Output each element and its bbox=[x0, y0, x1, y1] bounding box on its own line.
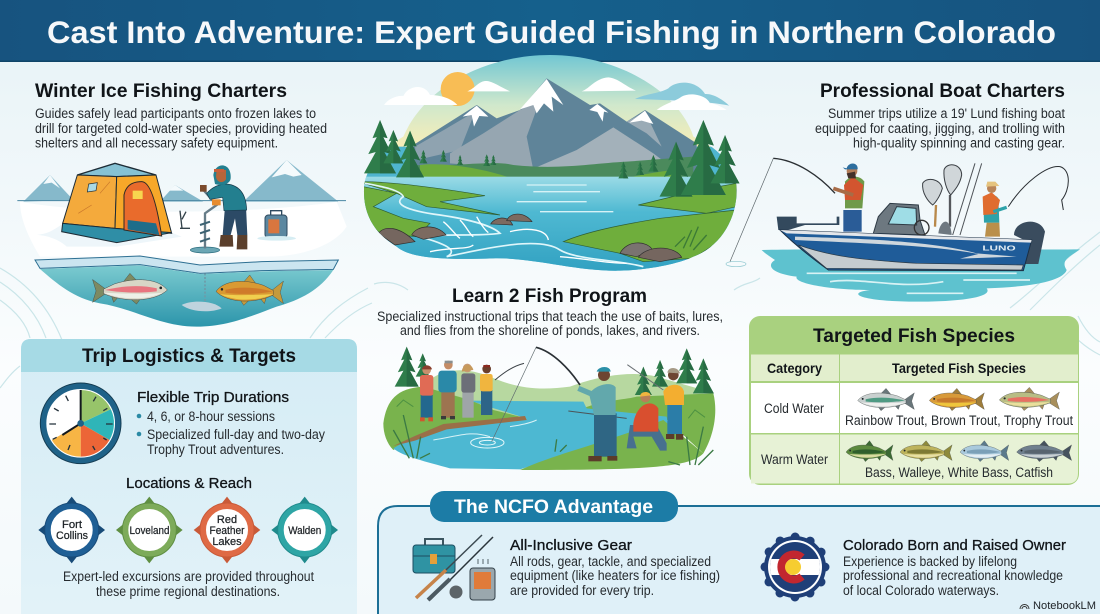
text: learn 2 fish description bbox=[377, 309, 723, 338]
text: winter description: Guides safely lead participants onto frozen lakes to bbox=[35, 106, 316, 121]
text: boat description: high-quality spinning and casting gear. bbox=[853, 136, 1065, 150]
text: all-inclusive gear: equipment (like heaters for ice fishing) bbox=[510, 568, 720, 583]
table row: warm water bbox=[751, 434, 1078, 484]
text: all-inclusive gear: are provided for every trip. bbox=[510, 583, 654, 598]
heading: learn 2 fish: Learn 2 Fish Program bbox=[452, 285, 647, 307]
illustration: fishing boat bbox=[726, 158, 1080, 302]
badge: Walden: Walden bbox=[288, 525, 321, 537]
heading: trip logistics: Trip Logistics & Targets bbox=[82, 345, 296, 367]
text: boat description: equipped for caating, jigging, and trolling with bbox=[815, 121, 1065, 136]
badge: Red Feather Lakes: Lakes bbox=[212, 536, 242, 548]
text: boat description: Summer trips utilize a 19' Lund fishing boat bbox=[828, 106, 1065, 121]
badge: Walden bbox=[271, 497, 338, 563]
badge: Fort Collins: Collins bbox=[56, 530, 88, 542]
table row: cold water: Rainbow Trout, Brown Trout, Trophy Trout bbox=[845, 413, 1073, 428]
badge: Red Feather Lakes: Feather bbox=[210, 525, 245, 537]
text: winter description: drill for targeted cold-water species, providing heated bbox=[35, 121, 327, 136]
illustration: fishing boat: LUNO bbox=[982, 246, 1017, 253]
text: colorado born and raised owner: Experience is backed by lifelong bbox=[843, 554, 1017, 569]
text: learn 2 fish description: and flies from the shoreline of ponds, lakes, and rivers. bbox=[400, 323, 700, 338]
badge: Loveland bbox=[116, 497, 183, 563]
panel: the NCFO advantage bbox=[378, 491, 1100, 614]
text: boat description bbox=[815, 106, 1065, 150]
text: locations caption bbox=[63, 569, 314, 599]
badge: Red Feather Lakes: Red bbox=[217, 514, 237, 526]
text: locations caption: these prime regional destinations. bbox=[96, 584, 280, 599]
panel: trip logistics and targets bbox=[21, 339, 357, 614]
table header row: Category bbox=[767, 360, 822, 376]
text: locations caption: Expert-led excursions are provided throughout bbox=[63, 569, 314, 584]
badge: Loveland: Loveland bbox=[130, 525, 170, 537]
illustration: ice fishing scene bbox=[17, 160, 347, 327]
table row: warm water: Warm Water bbox=[761, 452, 828, 467]
header band: trip logistics bbox=[21, 339, 357, 372]
panel: learn 2 fish program bbox=[377, 285, 723, 470]
table row: cold water bbox=[751, 383, 1078, 433]
text: flexible trip durations: Specialized full-day and two-day bbox=[147, 427, 325, 442]
badge: Fort Collins: Fort bbox=[62, 519, 82, 531]
header banner bbox=[0, 0, 1100, 62]
text: all-inclusive gear: All rods, gear, tackle, and specialized bbox=[510, 554, 711, 569]
text: all-inclusive gear bbox=[510, 537, 720, 598]
title: Cast Into Adventure: Expert Guided Fishing in Northern Colorado bbox=[47, 14, 1056, 50]
text: flexible trip durations: Trophy Trout adventures. bbox=[147, 442, 284, 457]
heading: targeted fish species: Targeted Fish Species bbox=[813, 325, 1015, 347]
text: winter description: shelters and all necessary safety equipment. bbox=[35, 136, 278, 150]
table row: cold water: Cold Water bbox=[764, 401, 824, 416]
heading: boat charters: Professional Boat Charters bbox=[820, 80, 1065, 102]
table header row: Targeted Fish Species bbox=[892, 360, 1026, 376]
table header row bbox=[751, 354, 1078, 381]
NotebookLM watermark: NotebookLM bbox=[1033, 600, 1096, 612]
table row: warm water: Bass, Walleye, White Bass, Catfish bbox=[865, 465, 1053, 480]
text: learn 2 fish description: Specialized instructional trips that teach the use of baits, lures, bbox=[377, 309, 723, 324]
icon: Colorado flag badge bbox=[764, 536, 826, 598]
text: all-inclusive gear: All-Inclusive Gear bbox=[510, 537, 632, 554]
panel: targeted fish species table bbox=[749, 316, 1079, 485]
illustration: shoreline lesson bbox=[383, 347, 715, 470]
badge: Fort Collins bbox=[38, 497, 105, 563]
panel: winter ice fishing charters bbox=[17, 80, 347, 327]
text: flexible trip durations bbox=[137, 389, 325, 457]
heading pill: the NCFO advantage bbox=[430, 491, 678, 522]
icon: clock bbox=[40, 383, 121, 464]
text: colorado born and raised owner: Colorado Born and Raised Owner bbox=[843, 537, 1066, 554]
heading: locations and reach: Locations & Reach bbox=[126, 475, 252, 492]
text: colorado born and raised owner bbox=[843, 537, 1066, 598]
text: colorado born and raised owner: professional and recreational knowledge bbox=[843, 568, 1063, 583]
text: winter description bbox=[35, 106, 327, 150]
panel: professional boat charters bbox=[726, 80, 1080, 302]
heading pill: the NCFO advantage: The NCFO Advantage bbox=[454, 497, 653, 518]
text: flexible trip durations: 4, 6, or 8-hour sessions bbox=[147, 409, 275, 424]
icon: tackle box, rods and heater bbox=[413, 535, 495, 600]
text: flexible trip durations: Flexible Trip Durations bbox=[137, 389, 289, 406]
heading: winter ice fishing: Winter Ice Fishing Charters bbox=[35, 80, 287, 102]
text: colorado born and raised owner: of local Colorado waterways. bbox=[843, 583, 999, 598]
badge: Red Feather Lakes bbox=[194, 497, 260, 563]
illustration: mountain lake landscape bbox=[360, 50, 740, 280]
